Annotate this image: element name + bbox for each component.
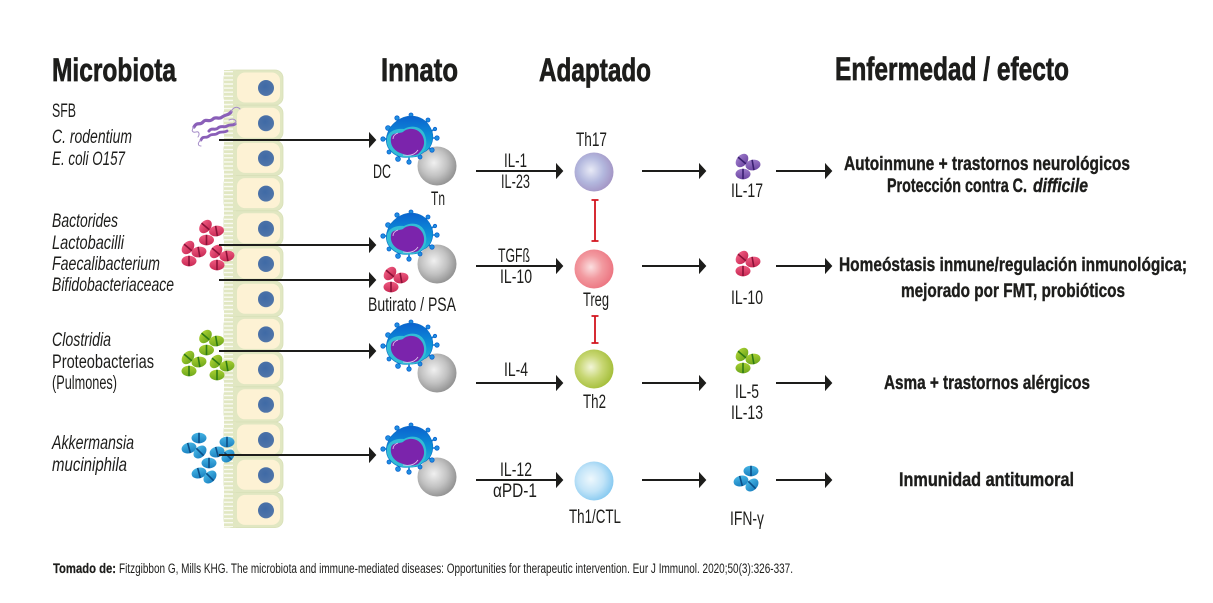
text block: Akkermansia group: muciniphila — [52, 455, 127, 476]
label: IL-5 / IL-13 — [731, 382, 763, 424]
label: IL-23: IL-23 — [501, 172, 530, 193]
text block: Clostridia group: (Pulmones) — [52, 373, 117, 394]
text block: Akkermansia group — [51, 433, 134, 476]
arrow: row 2 to DC — [219, 240, 375, 250]
icon: dendritic cell row 3 — [381, 320, 439, 371]
icon: blue bacteria — [180, 433, 237, 486]
text block: Bactorides group: Bactorides — [52, 211, 118, 232]
label: Th17: Th17 — [576, 130, 607, 151]
text block: Akkermansia group: Akkermansia — [51, 433, 134, 454]
icon: Tn cell row 1 — [418, 146, 456, 186]
effect: autoimmune: Protección contra C. — [887, 175, 1027, 197]
text block: Clostridia group — [52, 330, 154, 394]
arrow: to Th2 — [476, 378, 562, 388]
icon: green bacteria — [179, 327, 235, 380]
arrow: to effect 3 — [776, 378, 831, 388]
effect: antitumor: Inmunidad antitumoral — [899, 469, 1074, 491]
icon: IL-17 cytokine — [733, 151, 761, 179]
cell: Th2 — [574, 350, 614, 388]
label: Tn: Tn — [431, 189, 445, 210]
label: αPD-1: αPD-1 — [493, 481, 537, 502]
arrow: Th2 to IL-5 — [642, 378, 705, 388]
label: IL-1: IL-1 — [504, 151, 527, 172]
arrow: Treg to IL-10 — [642, 260, 705, 272]
label: IL-4: IL-4 — [504, 360, 528, 381]
icon: dendritic cell row 2 — [381, 210, 439, 261]
footer citation: Fitzgibbon G, Mills KHG. The microbiota and immune-mediated diseases: Opportunities for therapeutic intervention. Eur J Immunol. 2020;50(3):326-337. — [119, 561, 793, 576]
arrow: row 3 to DC — [219, 346, 375, 356]
title: Innato: Innato — [381, 52, 458, 88]
arrow: row 4 to DC — [219, 450, 375, 460]
arrow: to Th1 — [476, 474, 562, 486]
arrow: Th1 to IFN — [642, 474, 705, 486]
arrow: to Treg — [476, 260, 562, 272]
text block: SFB group: C. rodentium — [52, 127, 132, 148]
icon: IFN-γ cytokine — [732, 466, 761, 494]
text block: Clostridia group: Clostridia — [52, 330, 111, 351]
title: Adaptado: Adaptado — [539, 52, 651, 88]
text block: SFB group: SFB — [52, 101, 76, 122]
text block: Bactorides group: Bifidobacteriaceace — [52, 275, 174, 296]
text block: SFB group: E. coli O157 — [52, 149, 126, 170]
label: DC: DC — [373, 162, 391, 183]
label: IL-5 / IL-13: IL-5 — [735, 382, 759, 403]
label: TGFß: TGFß — [498, 246, 530, 267]
icon: Tn cell row 3 — [418, 354, 456, 392]
label: Treg: Treg — [583, 290, 609, 311]
arrow: to effect 4 — [776, 474, 831, 486]
effect: asthma: Asma + trastornos alérgicos — [884, 372, 1090, 394]
label: IFN-γ: IFN-γ — [730, 509, 764, 530]
label: IL-17: IL-17 — [731, 181, 763, 202]
icon: red bacteria — [179, 217, 235, 270]
title: Microbiota: Microbiota — [52, 52, 176, 88]
footer citation: Tomado de: — [53, 561, 116, 576]
epithelial cell column — [224, 70, 283, 528]
cell: Treg — [574, 250, 614, 288]
label: IL-12: IL-12 — [500, 460, 532, 481]
footer citation — [53, 561, 793, 576]
text block: Bactorides group — [52, 211, 174, 296]
text block: Bactorides group: Lactobacilli — [52, 233, 125, 254]
label: Th1/CTL: Th1/CTL — [569, 507, 621, 528]
label: IL-10: IL-10 — [731, 288, 763, 309]
arrow: row 1 to DC — [219, 134, 375, 146]
label: IL-5 / IL-13: IL-13 — [731, 403, 763, 424]
effect: autoimmune — [844, 153, 1130, 197]
arrow: row 2 to butyrate — [219, 274, 375, 286]
icon: dendritic cell row 4 — [381, 423, 439, 474]
cell: Th17 — [574, 152, 614, 192]
text block: Clostridia group: Proteobacterias — [52, 352, 154, 373]
title: Enfermedad / efecto: Enfermedad / efecto — [835, 51, 1069, 87]
text block: Bactorides group: Faecalibacterium — [52, 254, 160, 275]
label: Butirato / PSA: Butirato / PSA — [368, 295, 456, 316]
icon: purple spirochete bacteria — [192, 107, 240, 146]
arrow: to effect 1 — [776, 166, 831, 176]
inhibition bar: Treg / Th2 — [592, 316, 598, 343]
effect: homeostasis: mejorado por FMT, probióticos — [901, 280, 1125, 302]
icon: Tn cell row 4 — [418, 458, 456, 496]
effect: autoimmune: difficile — [1033, 175, 1088, 197]
cell: Th1/CTL — [574, 462, 614, 500]
effect: autoimmune: Autoinmune + trastornos neurológicos — [844, 153, 1130, 175]
arrow: Th17 to IL-17 — [642, 166, 705, 176]
inhibition bar: Th17 / Treg — [592, 200, 598, 241]
icon: IL-5/IL-13 cytokine — [733, 345, 761, 373]
icon: butyrate pills — [381, 264, 409, 292]
icon: dendritic cell row 1 — [381, 113, 439, 164]
label: IL-10: IL-10 — [500, 267, 532, 288]
icon: Tn cell row 2 — [418, 244, 456, 284]
label: Th2: Th2 — [583, 392, 606, 413]
text block: SFB group — [52, 101, 132, 170]
arrow: to Th17 — [476, 166, 562, 176]
arrow: to effect 2 — [776, 260, 831, 272]
effect: homeostasis — [839, 254, 1187, 302]
icon: IL-10 cytokine — [733, 248, 761, 276]
